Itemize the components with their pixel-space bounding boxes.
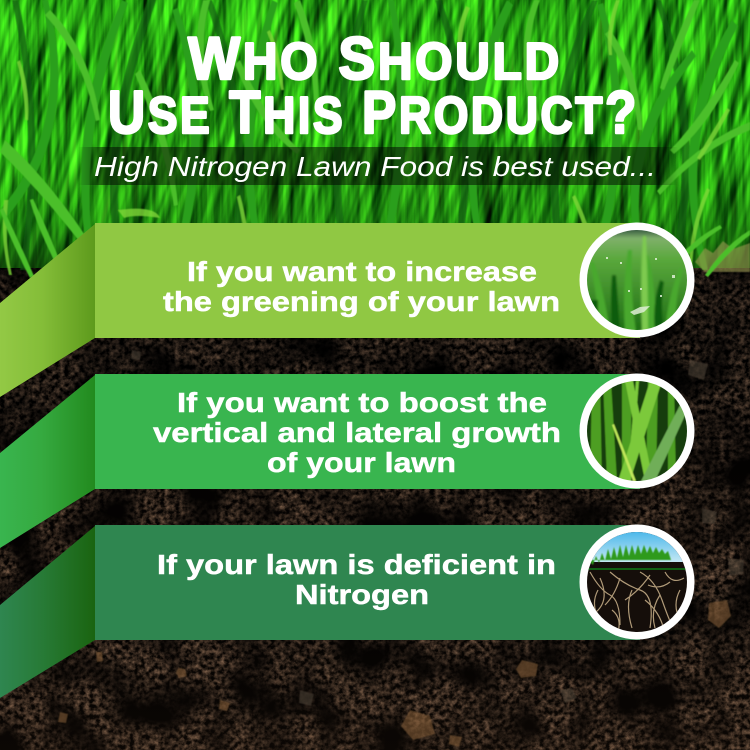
subtitle band: High Nitrogen Lawn Food is best used...: [94, 151, 656, 182]
ribbon 3: If your lawn is deficient in: [157, 549, 556, 580]
ribbon 3: Nitrogen: [295, 579, 429, 610]
title: [108, 25, 639, 146]
subtitle band: [78, 147, 678, 185]
icon: dewy grass photo: [580, 222, 694, 338]
ribbon 2: [0, 374, 640, 548]
icon: grass and roots photo: [580, 524, 694, 640]
grass background: [0, 0, 750, 278]
soil background: [0, 255, 750, 750]
ribbon 1: [0, 223, 640, 397]
ribbon 1: If you want to increase: [187, 256, 537, 287]
ribbon 1: the greening of your lawn: [163, 286, 560, 317]
grass blades: [0, 0, 750, 285]
ribbon 3: [0, 525, 640, 698]
ribbon 2: of your lawn: [267, 447, 456, 478]
ribbon 2: If you want to boost the: [177, 387, 547, 418]
icon: grass blades close-up photo: [580, 374, 694, 488]
title: WHO SHOULD: [188, 25, 562, 92]
ribbon 2: vertical and lateral growth: [153, 417, 561, 448]
title: USE THIS PRODUCT?: [108, 79, 639, 146]
